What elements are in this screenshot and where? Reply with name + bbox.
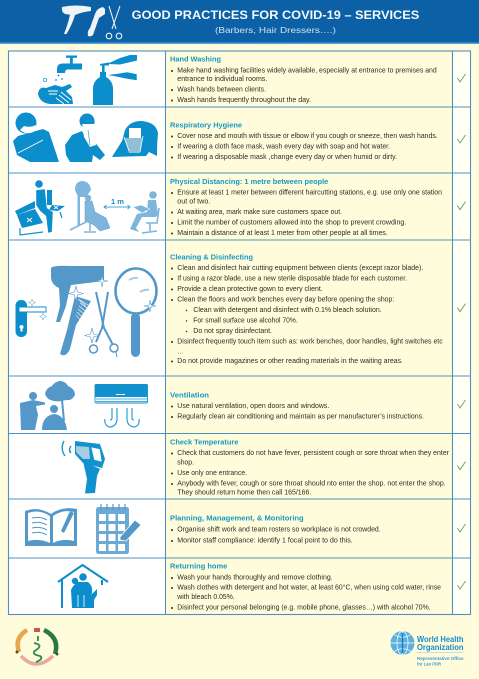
- icon: person coughing into elbow: [13, 112, 59, 162]
- icon: lower hand: [106, 72, 137, 80]
- panel text: physical distancing: Maintain a distance of at least 1 meter from other people at all times.: [177, 229, 388, 237]
- logo: World Health Organization: for Lao PDR: [417, 662, 442, 666]
- icon: faucet: [55, 56, 82, 81]
- icon: sparkles: [68, 275, 156, 343]
- panel text: ventilation: [170, 390, 424, 421]
- bullets: [171, 529, 173, 542]
- panel: respiratory hygiene icons: [13, 112, 158, 162]
- subtitle: (Barbers, Hair Dressers….): [215, 25, 336, 35]
- panel text: physical distancing: out of two.: [177, 197, 210, 205]
- icon: air flow: [105, 408, 139, 427]
- panel text: cleaning and disinfecting: Clean with detergent and disinfect with 0.1% bleach solution.: [193, 306, 382, 314]
- panel text: physical distancing: At waiting area, mark make sure customers space out.: [177, 208, 342, 216]
- panel text: cleaning and disinfecting: Provide a clean protective gown to every client.: [177, 285, 323, 293]
- icon: person under salon dryer: [70, 181, 110, 232]
- panel text: cleaning and disinfecting: Clean and disinfect hair cutting equipment between clients (except razor blade).: [177, 264, 423, 272]
- panel text: hand washing: Wash hands frequently throughout the day.: [177, 96, 311, 104]
- bullets: [171, 192, 173, 234]
- icon: person reading on chair: [130, 191, 159, 233]
- panel text: returning home: Wash clothes with detergent and hot water, at least 60°C, when using cold water, rinse: [177, 584, 441, 592]
- panel text: cleaning and disinfecting: Do not provide magazines or other reading materials in the waiting areas.: [177, 357, 403, 365]
- header banner: [0, 0, 479, 44]
- logo: ministry of health emblem: [16, 628, 58, 664]
- icon: WHO emblem: [390, 631, 414, 655]
- panel text: returning home: [170, 562, 441, 611]
- check marks: [458, 74, 466, 589]
- panel text: respiratory hygiene: [170, 120, 438, 161]
- heading: Check Temperature: [170, 437, 238, 446]
- title: GOOD PRACTICES FOR COVID-19 – SERVICES: [132, 10, 420, 22]
- icon: air conditioner: [95, 384, 148, 403]
- icon: door handle: [16, 299, 46, 337]
- panel text: respiratory hygiene: If wearing a cloth face mask, wash every day with soap and hot water.: [177, 142, 390, 150]
- panel text: physical distancing: Limit the number of customers allowed into the shop to prevent crowding.: [177, 218, 406, 226]
- heading: Cleaning & Disinfecting: [170, 252, 253, 261]
- WHO office: Representative Office: [417, 656, 464, 661]
- panel text: physical distancing: [170, 177, 442, 237]
- 1 metre distance arrow: 1 m: [111, 197, 124, 206]
- panel text: cleaning and disinfecting: If using a razor blade, use a new sterile disposable blade for each customer.: [177, 274, 407, 282]
- panel text: respiratory hygiene: If wearing a disposable mask ,change every day or when humid or dirty.: [177, 153, 397, 161]
- icon: hand mirror: [116, 268, 156, 357]
- bullets: [171, 268, 187, 362]
- panel text: check temperature: Check that customers do not have fever, persistent cough or sore throat when they enter: [177, 449, 450, 457]
- bullets: [171, 70, 173, 102]
- panel text: check temperature: [170, 437, 450, 497]
- panel: ventilation icons: [20, 381, 148, 430]
- heading: Ventilation: [170, 390, 209, 399]
- panel text: check temperature: Use only one entrance.: [177, 469, 247, 477]
- panel text: ventilation: Use natural ventilation, open doors and windows.: [177, 402, 329, 410]
- panel text: hand washing: Make hand washing facilities widely available, especially at entrance to premises and: [177, 66, 437, 74]
- logo: World Health Organization: [390, 631, 464, 666]
- panel text: check temperature: They should return home then call 165/166.: [177, 489, 311, 497]
- WHO name: World Health: [417, 635, 464, 644]
- icon: woman wearing face mask: [112, 121, 158, 157]
- panel text: check temperature: Anybody with fever, cough or sore throat should nto enter the shop. not enter the shop.: [177, 479, 446, 487]
- panel text: ventilation: Regularly clean air conditioning and maintain as per manufacturer’s instructions.: [177, 413, 424, 421]
- icon: family in house: [58, 565, 108, 608]
- panel text: returning home: Wash your hands thoroughly and remove clothing.: [177, 573, 333, 581]
- panel text: cleaning and disinfecting: Disinfect frequently touch item such as: work benches, door handles, light switches etc: [177, 338, 443, 346]
- panel text: physical distancing: Ensure at least 1 meter between different haircutting stations, e.g. use only one station: [177, 189, 442, 197]
- panel: hand washing icons: [38, 55, 137, 105]
- panel text: check temperature: shop.: [177, 458, 194, 466]
- icon: soap dispenser: [93, 62, 113, 105]
- panel text: returning home: with bleach 0.05%.: [176, 593, 235, 601]
- icon: hair dryer: [51, 266, 104, 322]
- bullets: [171, 577, 173, 609]
- 1 metre distance arrow: [104, 197, 130, 209]
- icon: hair dryer: [62, 6, 91, 34]
- icon: barber outdoors under tree: [20, 381, 75, 430]
- panel text: respiratory hygiene: Cover nose and mouth with tissue or elbow if you cough or sneeze, then wash hands.: [177, 132, 438, 140]
- panel text: cleaning and disinfecting: Do not spray disinfectant.: [193, 327, 272, 335]
- panel text: cleaning and disinfecting: [170, 252, 443, 365]
- icon: calendar with pencil: [96, 504, 141, 554]
- icon: infrared thermometer: [62, 441, 105, 494]
- panel: physical distancing icons: [15, 180, 159, 235]
- panel text: hand washing: [170, 55, 437, 104]
- heading: Respiratory Hygiene: [170, 120, 242, 129]
- icon: washing hands: [38, 78, 73, 104]
- icon: comb: [88, 7, 105, 36]
- panel text: cleaning and disinfecting: For small surface use alcohol 70%.: [193, 317, 298, 325]
- heading: Physical Distancing: 1 metre between people: [170, 177, 328, 186]
- panel text: hand washing: entrance to individual rooms.: [177, 75, 267, 83]
- heading: Planning, Management, & Monitoring: [170, 514, 304, 523]
- icon: upper hand: [107, 55, 137, 64]
- panel: planning and monitoring icons: [25, 504, 141, 554]
- bullets: [171, 452, 173, 485]
- panel text: planning and monitoring: [170, 514, 381, 544]
- bullets: [171, 406, 173, 418]
- panel text: returning home: Disinfect your personal belonging (e.g. mobile phone, glasses…) with alcohol 70%.: [177, 603, 431, 611]
- panel text: cleaning and disinfecting: Clean the floors and work benches every day before opening the shop:: [177, 296, 394, 304]
- icon: person on bench: [15, 180, 65, 235]
- icon: person sneezing into tissue: [65, 114, 105, 162]
- icon: scissors: [106, 6, 122, 39]
- panel text: planning and monitoring: Organise shift work and team rosters so workplace is not crowded.: [177, 526, 381, 534]
- icon: comb: [60, 296, 91, 355]
- icon: scissors: [90, 292, 118, 357]
- panel text: cleaning and disinfecting: …: [177, 347, 183, 355]
- icon: open book with pencil: [25, 508, 77, 546]
- logo: World Health Organization: Organization: [417, 643, 464, 652]
- heading: Hand Washing: [170, 55, 221, 64]
- panel text: hand washing: Wash hands between clients.: [177, 86, 266, 94]
- panel text: planning and monitoring: Monitor staff compliance: identify 1 focal point to do this.: [177, 536, 353, 544]
- panel: cleaning and disinfecting icons: [16, 266, 156, 357]
- heading: Returning home: [170, 562, 227, 571]
- bullets: [171, 136, 173, 158]
